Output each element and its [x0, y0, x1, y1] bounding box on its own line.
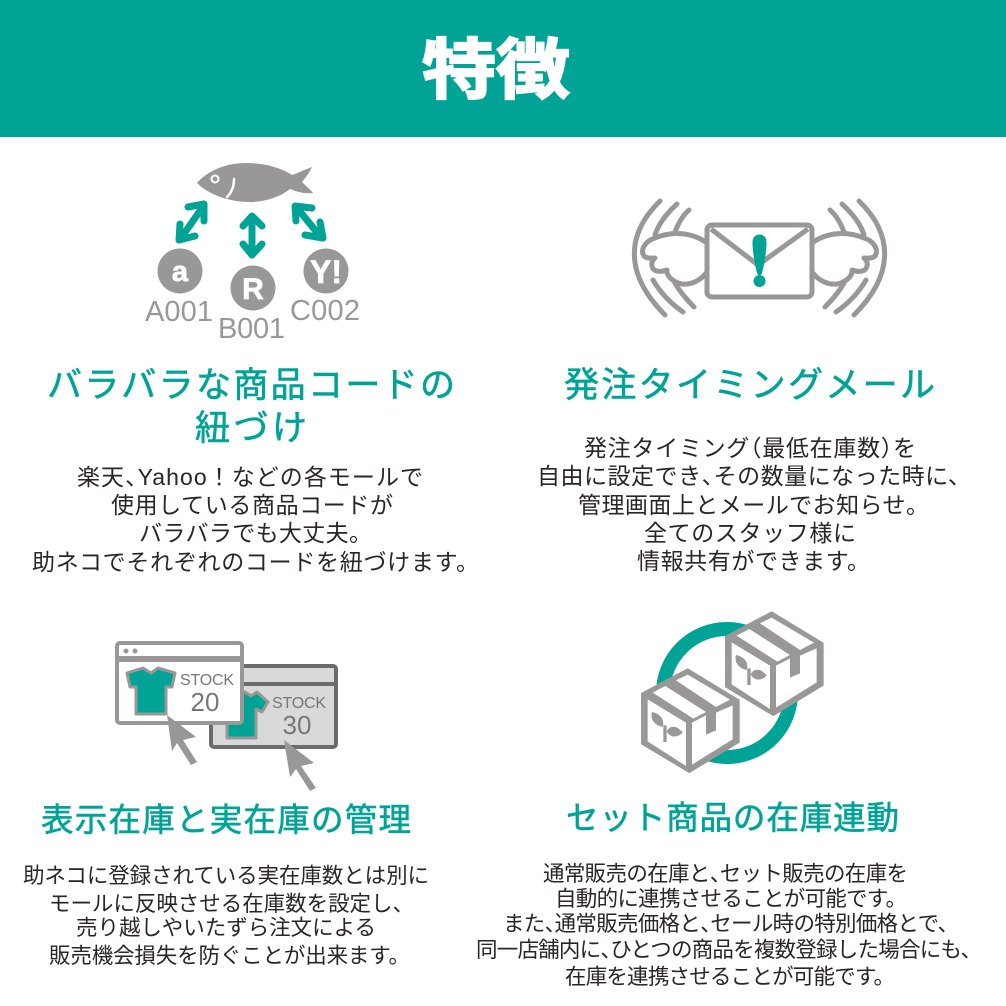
panel: product code linking: [32, 163, 479, 575]
description: 同一店舗内に、ひとつの商品を複数登録した場合にも、: [476, 938, 982, 962]
description: [32, 464, 479, 575]
icon: fish linked to mall codes: [145, 163, 360, 345]
heading: 紐づけ: [195, 409, 307, 448]
description: [537, 435, 971, 574]
heading: 発注タイミングメール: [564, 366, 935, 405]
description: 通常販売の在庫と、セット販売の在庫を: [543, 862, 908, 886]
panel: order timing mail: [537, 201, 971, 574]
description: 楽天、Yahoo！などの各モールで: [77, 464, 423, 490]
description: [23, 864, 429, 968]
description: [476, 862, 982, 989]
description: 発注タイミング（最低在庫数）を: [584, 435, 916, 461]
description: 全てのスタッフ様に: [644, 520, 856, 546]
icon: stock windows with cursors: 30: [283, 710, 311, 740]
description: 助ネコでそれぞれのコードを紐づけます。: [32, 549, 479, 575]
icon: stock windows with cursors: STOCK: [272, 695, 326, 712]
title banner: 特徴: [422, 33, 570, 107]
description: 情報共有ができます。: [637, 548, 870, 574]
panel: displayed vs actual stock: [23, 643, 429, 968]
icon: fish linked to mall codes: R: [242, 273, 264, 306]
icon: fish linked to mall codes: C002: [290, 295, 360, 327]
heading: バラバラな商品コードの: [47, 366, 455, 405]
heading: [47, 366, 455, 448]
description: モールに反映させる在庫数を設定し、: [49, 892, 414, 916]
icon: winged envelope with alert: [634, 201, 885, 315]
icon: stock windows with cursors: 20: [191, 687, 219, 717]
description: また、通常販売価格と、セール時の特別価格とで、: [503, 912, 959, 936]
icon: fish linked to mall codes: B001: [218, 313, 285, 345]
description: 管理画面上とメールでお知らせ。: [578, 492, 929, 518]
description: 販売機会損失を防ぐことが出来ます。: [49, 944, 410, 968]
title banner: [0, 0, 1006, 137]
description: バラバラでも大丈夫。: [139, 520, 372, 546]
description: 自動的に連携させることが可能です。: [555, 887, 907, 911]
icon: fish linked to mall codes: A001: [145, 296, 213, 328]
icon: two boxes with ring: [642, 612, 823, 772]
description: 自由に設定でき、その数量になった時に、: [537, 463, 971, 489]
description: 売り越しやいたずら注文による: [76, 916, 376, 940]
icon: fish linked to mall codes: Y!: [310, 254, 342, 290]
description: 在庫を連携させることが可能です。: [565, 965, 895, 989]
heading: 表示在庫と実在庫の管理: [41, 802, 411, 838]
description: 使用している商品コードが: [111, 492, 393, 518]
icon: stock windows with cursors: [117, 643, 336, 791]
description: 助ネコに登録されている実在庫数とは別に: [23, 864, 429, 888]
icon: fish linked to mall codes: a: [172, 256, 189, 288]
heading: セット商品の在庫連動: [566, 800, 899, 836]
panel: set product stock sync: [476, 612, 982, 989]
icon: stock windows with cursors: STOCK: [180, 672, 234, 689]
